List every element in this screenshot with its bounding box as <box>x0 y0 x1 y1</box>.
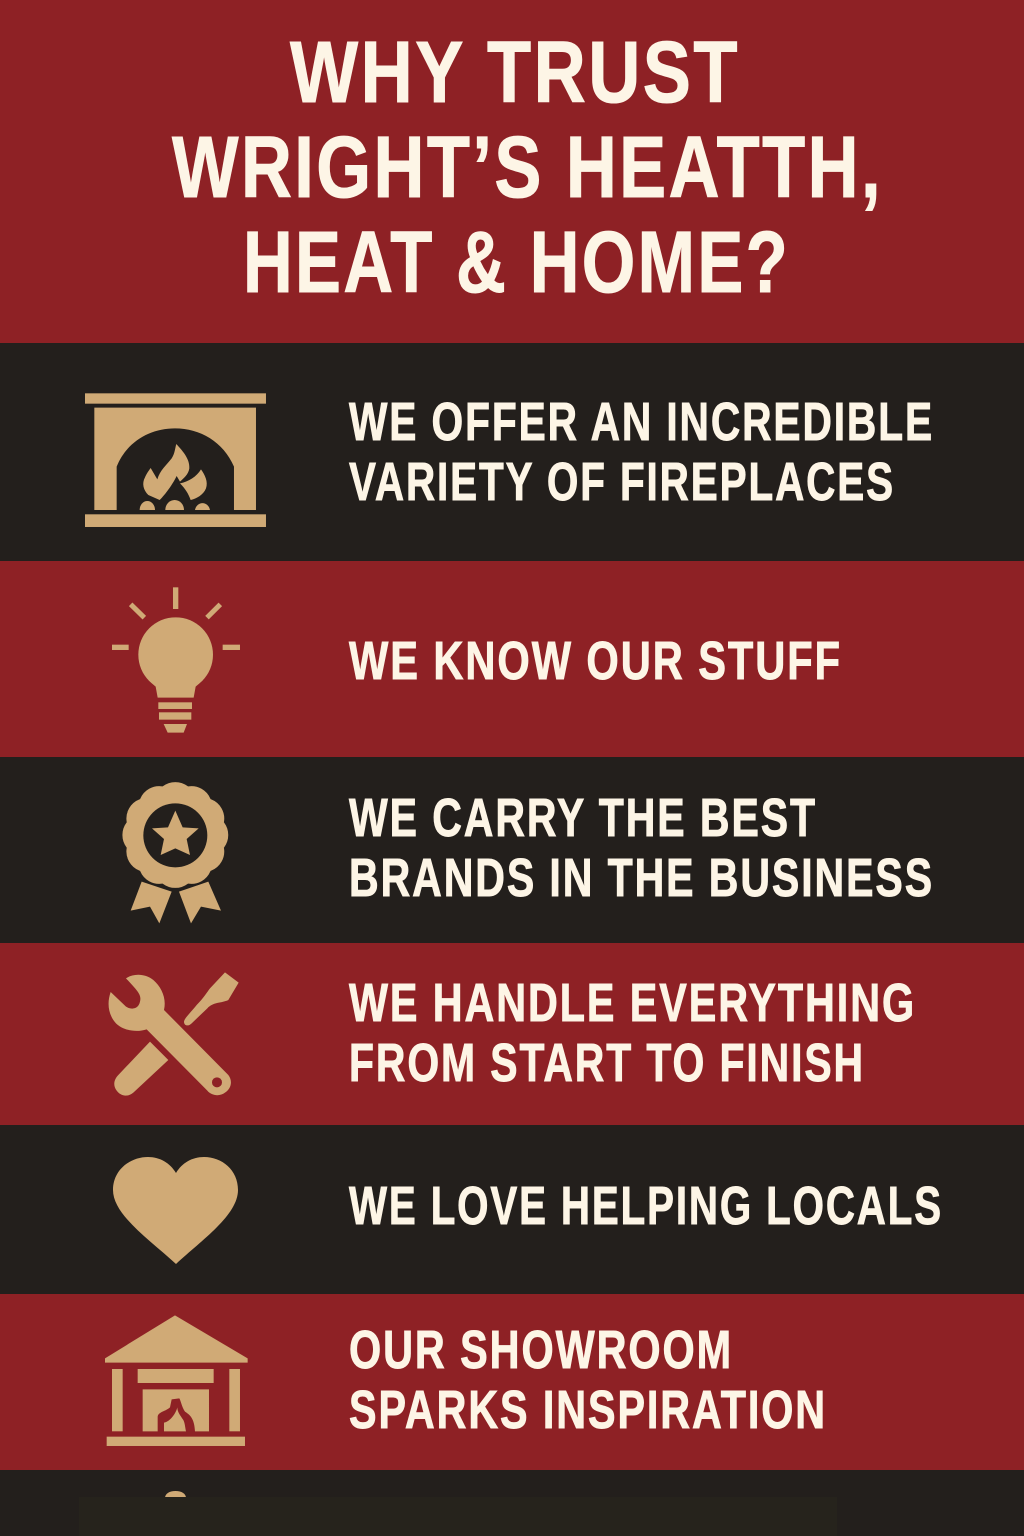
text: showroom: SPARKS INSPIRATION <box>349 1380 827 1440</box>
panel: best brands <box>0 757 1024 943</box>
panel: showroom <box>0 1294 1024 1470</box>
icon: fireplace <box>85 393 266 527</box>
panel: start to finish <box>0 943 1024 1125</box>
icon: showroom building <box>105 1315 248 1446</box>
blank box <box>79 1497 837 1536</box>
title: WHY TRUST <box>290 24 740 121</box>
panel: variety of fireplaces <box>0 343 1024 561</box>
title: WRIGHT’S HEATTH, <box>172 119 883 216</box>
text: start to finish <box>349 973 916 1093</box>
icon: light bulb <box>112 587 240 733</box>
title <box>172 24 883 311</box>
text: showroom <box>349 1320 827 1440</box>
panel: title banner <box>0 0 1024 343</box>
text: know our stuff: WE KNOW OUR STUFF <box>349 631 842 691</box>
text: best brands: WE CARRY THE BEST <box>349 788 817 848</box>
text: showroom: OUR SHOWROOM <box>349 1320 733 1380</box>
text: variety of fireplaces <box>349 392 934 512</box>
text: start to finish: FROM START TO FINISH <box>349 1033 865 1093</box>
icon: wrench and screwdriver <box>109 972 239 1096</box>
panel: bottom cut-off band <box>0 1470 1024 1536</box>
icon: award rosette <box>121 781 229 923</box>
icon: heart <box>113 1157 238 1264</box>
panel: know our stuff <box>0 561 1024 757</box>
panel: helping locals <box>0 1125 1024 1294</box>
text: best brands <box>349 788 934 908</box>
icon: cut-off dome <box>165 1491 186 1498</box>
title: HEAT & HOME? <box>243 214 790 311</box>
